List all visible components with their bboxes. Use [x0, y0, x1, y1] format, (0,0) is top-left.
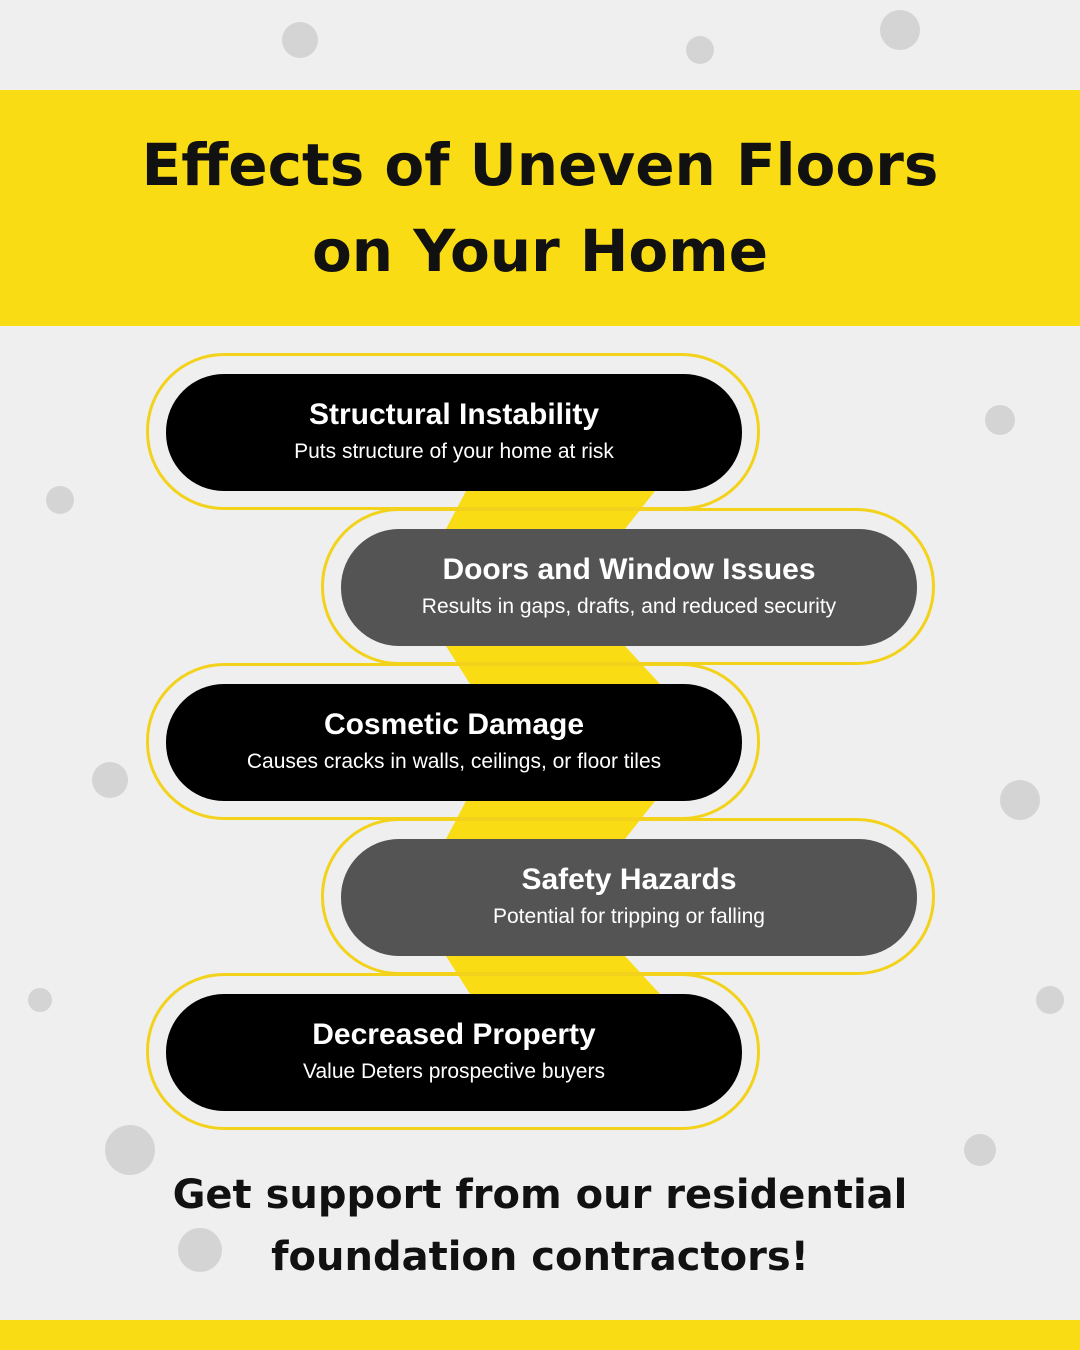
- title: on Your Home: [312, 217, 768, 285]
- pill: Cosmetic Damage: Causes cracks in walls, ceilings, or floor tiles: [247, 750, 661, 773]
- pill: Decreased Property: [166, 994, 742, 1111]
- footer call to action: [173, 1172, 907, 1280]
- title: [0, 90, 1080, 326]
- footer call to action: foundation contractors!: [271, 1234, 809, 1280]
- pill: Cosmetic Damage: Cosmetic Damage: [324, 708, 584, 741]
- pill: Structural Instability: [166, 374, 742, 491]
- pill: Doors and Window Issues: Results in gaps, drafts, and reduced security: [422, 595, 836, 618]
- pill: Structural Instability: Structural Instability: [309, 398, 599, 431]
- pill: Doors and Window Issues: [341, 529, 917, 646]
- pill: Safety Hazards: [341, 839, 917, 956]
- pill: Decreased Property: Decreased Property: [312, 1018, 596, 1051]
- pill: Cosmetic Damage: [166, 684, 742, 801]
- pill: Doors and Window Issues: Doors and Window Issues: [442, 553, 816, 586]
- bottom band: [0, 1320, 1080, 1350]
- pill: Structural Instability: Puts structure of your home at risk: [294, 440, 614, 463]
- pill: Decreased Property: Value Deters prospective buyers: [303, 1060, 605, 1083]
- title: Effects of Uneven Floors: [142, 131, 938, 199]
- pill: Safety Hazards: Potential for tripping or falling: [493, 905, 765, 928]
- pill: Safety Hazards: Safety Hazards: [521, 863, 737, 896]
- outlines: [146, 353, 760, 510]
- footer call to action: Get support from our residential: [173, 1172, 907, 1218]
